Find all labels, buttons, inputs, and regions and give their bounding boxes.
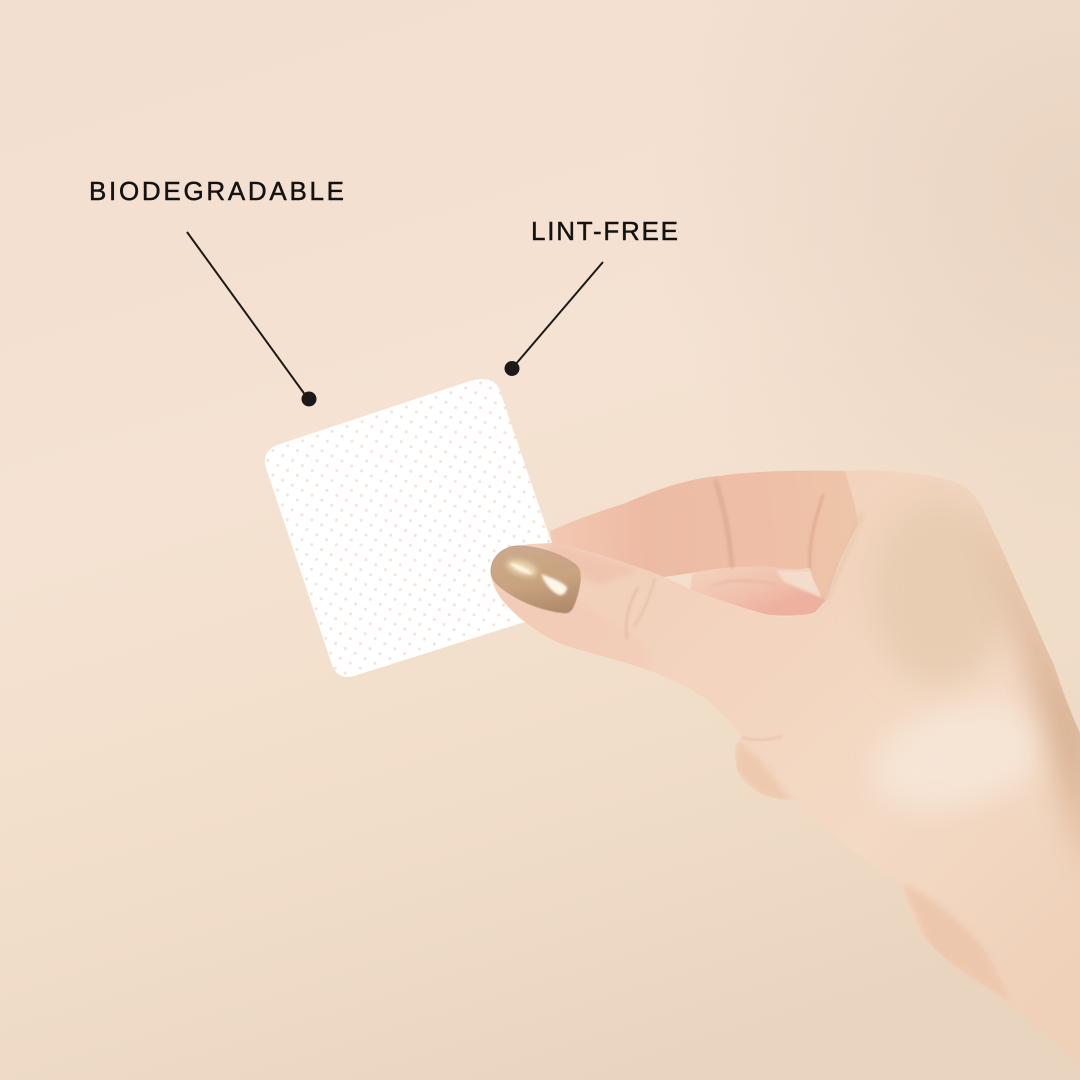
pointer: lint-free [504, 262, 603, 376]
back of hand, thumb and wrist [491, 470, 1080, 1002]
perforated white wipe [265, 379, 556, 677]
curled fingers [690, 566, 830, 616]
hand holding the wipe [490, 470, 1080, 1002]
label: lint-free: LINT-FREE [531, 216, 678, 246]
skin creases [626, 482, 862, 740]
pointer: biodegradable [187, 232, 316, 406]
index finger [550, 471, 870, 600]
gold nail [491, 546, 580, 613]
label: biodegradable: BIODEGRADABLE [89, 176, 344, 206]
